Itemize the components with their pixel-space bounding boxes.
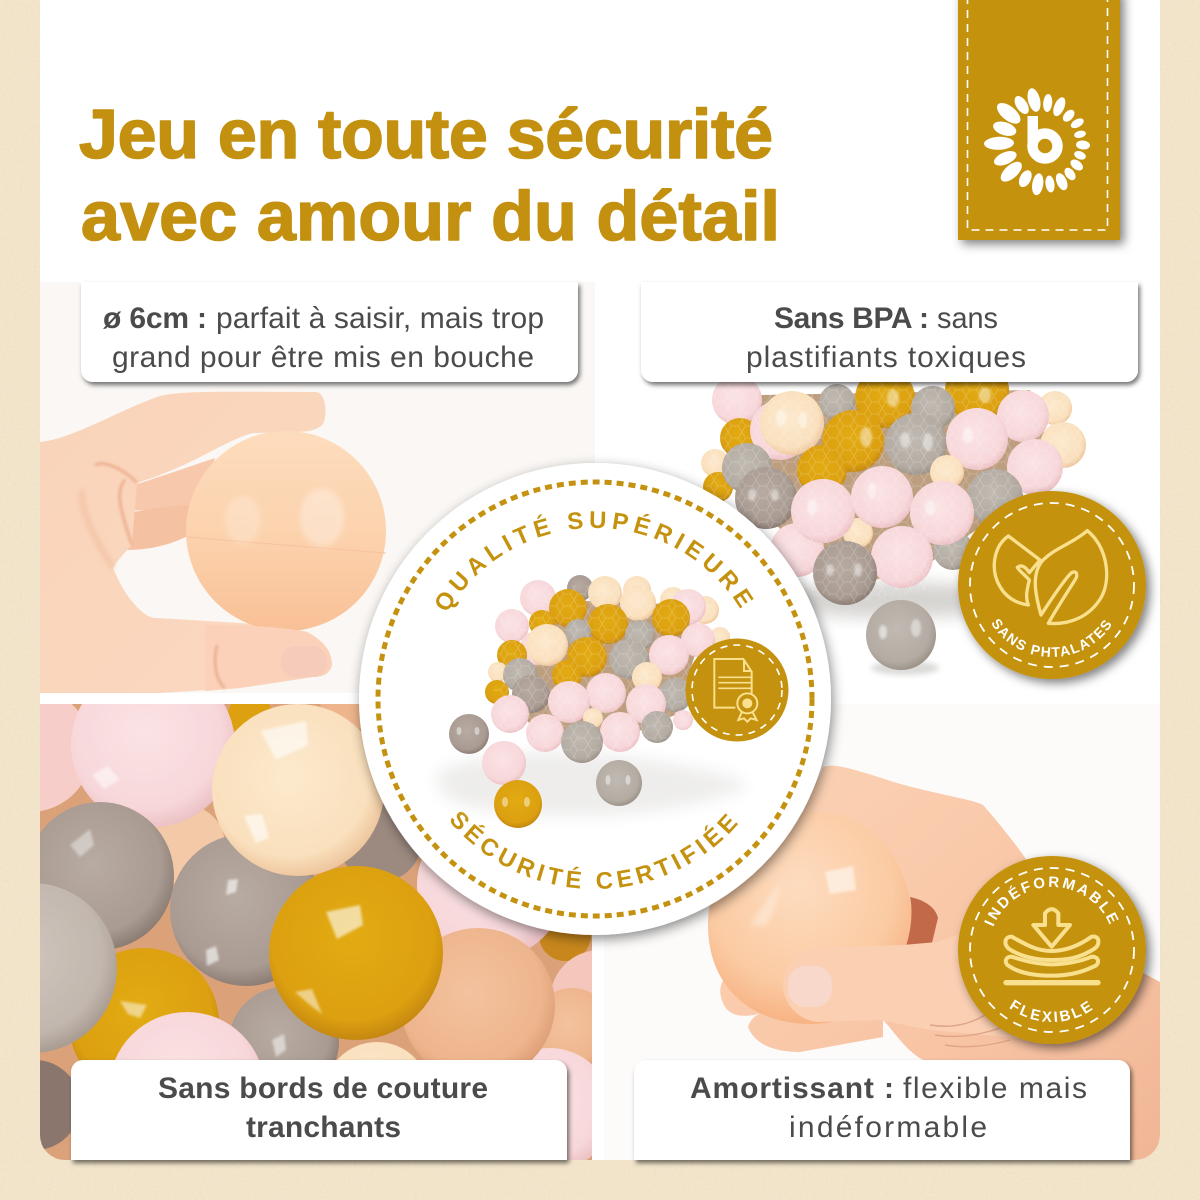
badge: sans phtalates — [955, 488, 1157, 690]
caption: no sharp seams — [71, 1060, 567, 1160]
icon: two leaves — [994, 531, 1107, 624]
caption: 6cm diameter: grand pour être mis en bouche — [112, 341, 534, 374]
peach ball — [186, 431, 386, 631]
caption: 6cm diameter: ø 6cm : — [103, 302, 207, 335]
icon: flower logo — [984, 87, 1090, 196]
brand label tag — [958, 0, 1120, 240]
caption: shock absorbing: Amortissant : — [690, 1072, 894, 1105]
panel: ball held in hand — [40, 282, 595, 693]
caption: shock absorbing: flexible mais — [903, 1072, 1087, 1105]
caption: 6cm diameter: parfait à saisir, mais trop — [216, 302, 544, 335]
caption: 6cm diameter — [81, 282, 578, 382]
badge: indéformable flexible — [955, 853, 1157, 1055]
caption: BPA free: sans — [937, 302, 998, 335]
hand gripping the ball — [720, 766, 1160, 1160]
thumb — [205, 625, 332, 691]
ball cluster in seal — [437, 575, 746, 828]
caption: BPA free: plastifiants toxiques — [746, 341, 1026, 374]
seal heading: top arc: QUALITÉ SUPÉRIEURE — [436, 511, 754, 610]
ball net cluster — [701, 382, 1086, 625]
title: avec amour du détail — [81, 177, 780, 255]
icon: certificate badge — [686, 638, 788, 742]
caption: BPA free — [641, 282, 1138, 382]
hand holding the ball — [40, 392, 332, 693]
panel: pile of balls, no sharp seams — [40, 704, 592, 1160]
title — [79, 95, 780, 255]
badge bottom text: FLEXIBLE — [1010, 1000, 1093, 1022]
caption: shock absorbing — [634, 1060, 1130, 1160]
icon: compressed layers with arrow — [1003, 909, 1101, 985]
caption: no sharp seams: Sans bords de couture — [158, 1072, 488, 1105]
crevice shadow — [906, 897, 938, 946]
badge top text: INDÉFORMABLE — [984, 876, 1119, 926]
central quality seal — [352, 458, 842, 948]
thumb and fingers — [783, 934, 1018, 1038]
panel: squeezed ball in hand, shock absorbing — [708, 766, 1160, 1160]
badge text: SANS PHTALATES — [992, 619, 1111, 657]
seal heading: bottom arc: SÉCURITÉ CERTIFIÉE — [450, 812, 738, 889]
glossy highlights — [70, 721, 363, 1057]
single taupe ball — [866, 600, 939, 675]
panel: net of balls, BPA free — [701, 382, 1086, 677]
caption: BPA free: Sans BPA : — [774, 302, 929, 335]
caption: no sharp seams: tranchants — [246, 1111, 401, 1144]
peach squeezable ball — [708, 812, 912, 1024]
title: Jeu en toute sécurité — [79, 95, 773, 173]
thumbnail — [281, 646, 327, 677]
thumbnail — [788, 966, 832, 1007]
caption: shock absorbing: indéformable — [789, 1111, 987, 1144]
